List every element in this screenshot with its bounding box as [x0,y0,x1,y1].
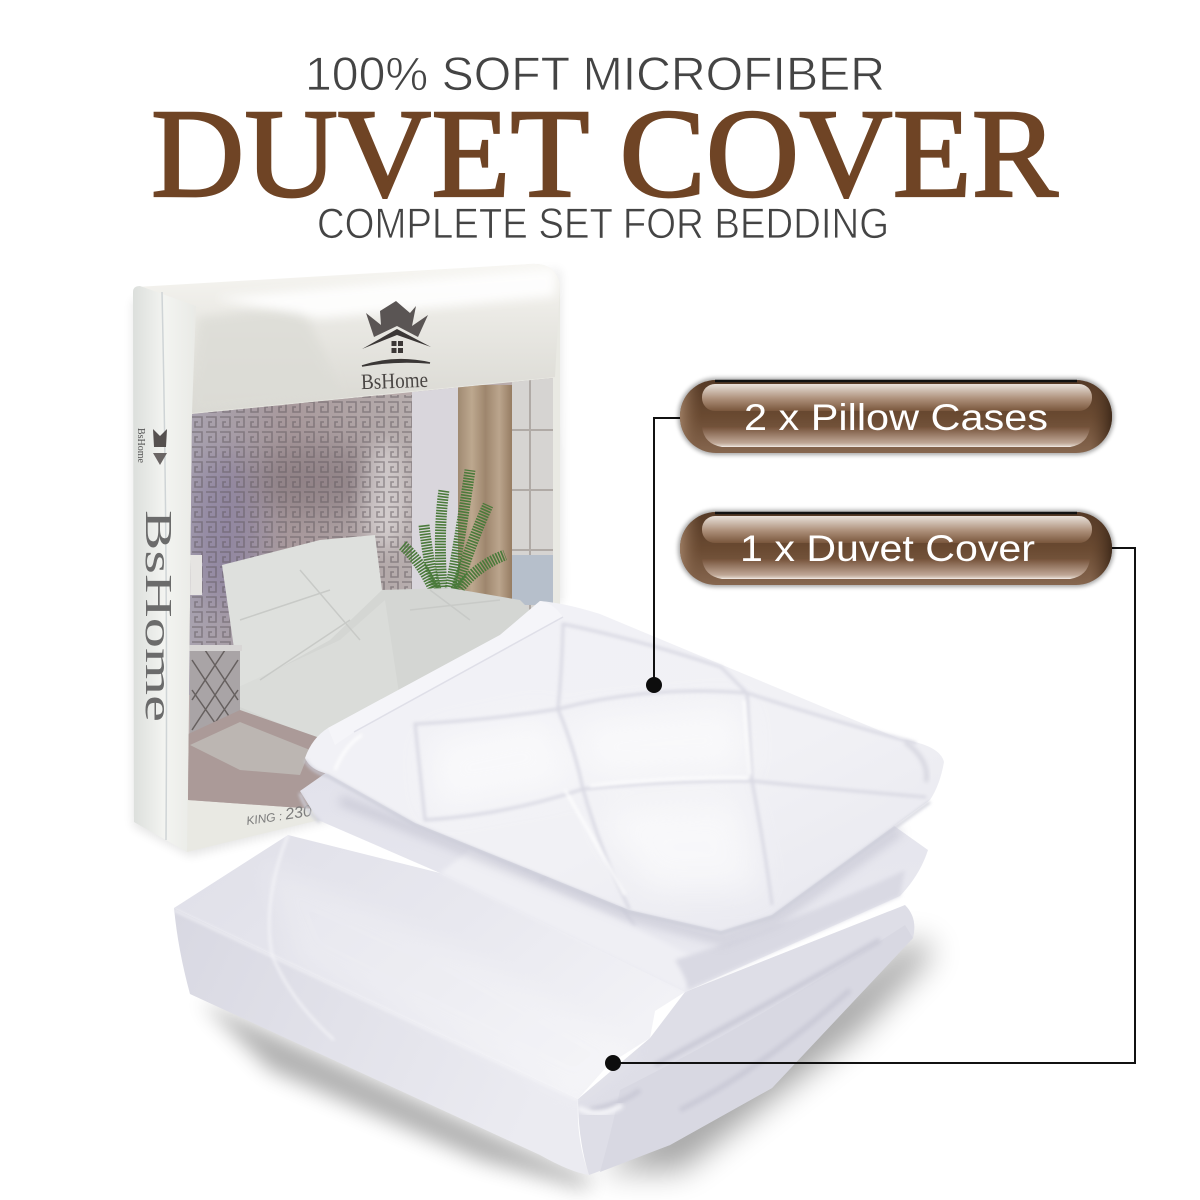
package top band [136,264,560,413]
shadow under pillow [340,800,900,940]
spine small logo [135,428,167,465]
curtain [458,385,513,605]
top pillow case [305,601,944,933]
window [512,378,553,609]
plant [402,470,505,590]
pill text: 2 x Pillow Cases [744,397,1048,438]
duvet top face [174,835,685,1099]
package size label: KING : 230 [245,803,313,829]
bedding stack [174,601,944,1190]
soft highlights [430,705,760,890]
package box [133,264,562,856]
main heading: DUVET COVER [151,84,1058,224]
subtitle bottom: COMPLETE SET FOR BEDDING [317,200,889,248]
package spine [133,286,196,852]
duvet right end [578,905,914,1175]
spine small logo: BsHome [135,428,146,464]
duvet front face [174,908,589,1175]
pleat highlights [335,700,750,895]
ground shadow right [600,940,935,1170]
lamp [190,555,202,595]
package photo [185,370,560,810]
leader line: duvet cover [605,548,1135,1071]
ground shadow left [200,1000,590,1190]
package brand: BsHome [361,367,428,394]
middle pillow case [300,770,928,992]
wall panel [189,395,382,695]
package logo [361,301,431,394]
nightstand [190,648,240,736]
leader line: pillow cases [646,418,681,693]
white wall [412,388,458,590]
label pill: 1 x Duvet Cover [678,510,1114,587]
pill text: 1 x Duvet Cover [740,528,1035,569]
subtitle top: 100% SOFT MICROFIBER [305,47,885,100]
seam strip [328,601,563,745]
dot: duvet cover [605,1055,621,1071]
duvet cover folded [174,835,914,1175]
floor [188,710,326,808]
bed [240,588,530,726]
title block [151,47,1058,248]
package shadow [133,270,562,856]
dot: pillow cases [646,677,662,693]
label pill: 2 x Pillow Cases [678,378,1114,455]
pleat folds [415,624,925,908]
spine brand text: BsHome [137,510,179,722]
package front [187,264,560,852]
duvet ribbon [269,835,334,1040]
